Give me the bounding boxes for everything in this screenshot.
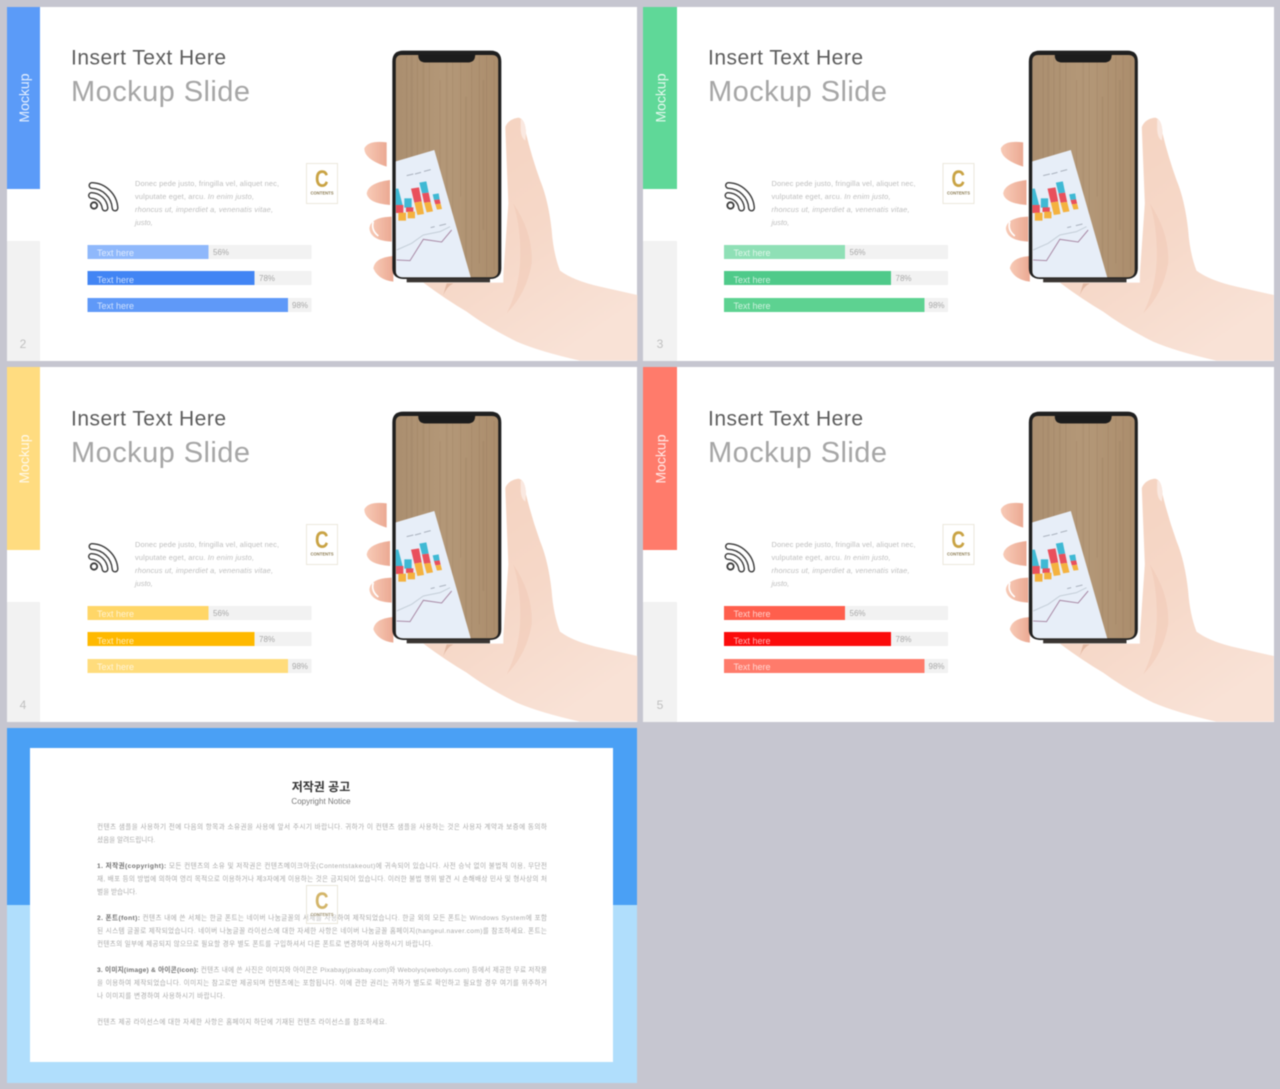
side tab: red [643, 367, 677, 550]
icon: signal [727, 186, 752, 209]
progress bars: 78% [259, 274, 275, 283]
body text [134, 179, 279, 227]
body text: justo, [134, 218, 153, 227]
slide 5: red mockup [643, 367, 1274, 722]
logo [943, 524, 974, 564]
watermark logo: C [315, 888, 328, 915]
clause 2: 2. 폰트(font): 컨텐츠 내에 쓴 서체는 한글 폰트는 네이버 나눔글꼴의 서체를 사용하여 제작되었습니다. 한글 외의 모든 폰트는 Windows System에 포함 [97, 913, 547, 922]
page number panel [643, 241, 677, 361]
heading: Insert Text Here [708, 408, 863, 430]
phone in hand [1001, 412, 1274, 722]
heading: Mockup Slide [71, 437, 250, 469]
progress bars: 56% [213, 609, 229, 618]
progress bars: Text here [734, 662, 771, 672]
logo: C [315, 527, 328, 554]
phone in hand [364, 51, 637, 361]
logo: CONTENTS [947, 552, 970, 556]
body text: vulputate eget, arcu. In enim justo, [772, 553, 890, 562]
progress bars [724, 606, 948, 673]
progress bars: 56% [850, 609, 866, 618]
heading: Insert Text Here [71, 46, 226, 70]
watermark logo [306, 886, 338, 924]
logo [306, 524, 338, 564]
logo: C [952, 166, 965, 193]
body text: vulputate eget, arcu. In enim justo, [772, 192, 890, 201]
clause 1: 1. 저작권(copyright): 모든 컨텐츠의 소유 및 저작권은 컨텐츠메이크아웃(Contentstakeout)에 귀속되어 있습니다. 사전 승낙 없이 불법적 이용, 무단전 [97, 861, 547, 870]
watermark logo: CONTENTS [310, 912, 334, 917]
body text: justo, [770, 579, 789, 588]
heading: Insert Text Here [708, 46, 863, 70]
side tab: green [643, 7, 677, 189]
body text: vulputate eget, arcu. In enim justo, [135, 553, 254, 562]
logo: CONTENTS [310, 552, 334, 556]
page number panel [7, 241, 40, 361]
slide: copyright notice [7, 728, 637, 1083]
body text: Donec pede justo, fringilla vel, aliquet nec, [135, 540, 279, 549]
body text: rhoncus ut, imperdiet a, venenatis vitae, [772, 205, 910, 214]
body text: justo, [770, 218, 789, 227]
body text: Donec pede justo, fringilla vel, aliquet nec, [772, 179, 916, 188]
progress bars: Text here [97, 636, 134, 646]
clause 3: 을 이용하여 제작되었습니다. 이미지는 참고로만 제공되며 컨텐츠에는 포함됩니다. 이에 관한 권리는 귀하가 별도로 확인하고 필요할 경우 여기를 위주하거 [97, 978, 547, 987]
notice title: 저작권 공고 [292, 779, 350, 794]
page number panel: 5 [657, 698, 664, 712]
body text: Donec pede justo, fringilla vel, aliquet nec, [772, 540, 916, 549]
intro paragraph: 셨음을 알려드립니다. [97, 835, 155, 844]
heading: Mockup Slide [71, 76, 250, 108]
progress bars: 98% [292, 662, 308, 671]
progress bars: Text here [734, 275, 771, 285]
white notice panel [30, 748, 613, 1062]
body text [134, 540, 279, 588]
progress bars: 78% [896, 274, 912, 283]
body text: rhoncus ut, imperdiet a, venenatis vitae, [135, 566, 273, 575]
slide 2: blue mockup [7, 7, 637, 361]
logo [943, 164, 974, 204]
intro paragraph [97, 822, 547, 844]
body text: vulputate eget, arcu. In enim justo, [135, 192, 254, 201]
tab label: Mockup [16, 434, 32, 484]
heading [71, 408, 250, 469]
page number panel: 2 [20, 337, 27, 351]
progress bars: Text here [97, 609, 134, 619]
clause 1 [97, 861, 547, 896]
tab label: Mockup [652, 434, 668, 484]
page number panel [7, 602, 40, 722]
slide 3: green mockup [643, 7, 1274, 361]
icon: signal [727, 546, 752, 570]
clause 1: 재, 배포 등의 방법에 의하여 영리 목적으로 이용하거나 제3자에게 이용하는 것은 금지되어 있습니다. 이러한 불법 행위 발견 시 손해배상 민사 및 형사상의 처 [97, 874, 547, 883]
body text: rhoncus ut, imperdiet a, venenatis vitae, [772, 566, 910, 575]
slide 4: yellow mockup [7, 367, 637, 722]
heading: Mockup Slide [708, 437, 887, 469]
heading [708, 46, 887, 108]
heading [71, 46, 250, 108]
progress bars: Text here [97, 248, 134, 258]
clause 2: 컨텐츠의 일부에 제공되지 않으므로 필요할 경우 별도 폰트를 구입하셔서 다른 폰트로 변경하여 사용하시기 바랍니다. [97, 939, 433, 948]
progress bars: Text here [97, 301, 134, 311]
closing line: 컨텐츠 제공 라이선스에 대한 자세한 사항은 홈페이지 하단에 기재된 컨텐츠 라이선스를 참조하세요. [97, 1017, 387, 1026]
notice title [291, 779, 351, 806]
page number panel [643, 602, 677, 722]
clause 1: 벌을 받습니다. [97, 887, 137, 896]
side tab: yellow [7, 367, 40, 550]
clause 3 [97, 965, 547, 1000]
progress bars: 98% [292, 301, 308, 310]
icon: signal [91, 546, 115, 570]
logo: CONTENTS [310, 190, 334, 196]
progress bars: Text here [734, 636, 771, 646]
progress bars: Text here [734, 301, 771, 311]
page number panel: 4 [20, 698, 27, 712]
progress bars: 98% [928, 301, 945, 310]
logo: CONTENTS [947, 190, 970, 196]
logo: C [952, 527, 965, 554]
clause 3: 3. 이미지(image) & 아이콘(icon): 컨텐츠 내에 쓴 사진은 이미지와 아이콘은 Pixabay(pixabay.com)와 Webolys(webolys.com) 등에서 제공한 무료 저작물 [97, 965, 547, 974]
tab label: Mockup [16, 73, 32, 123]
progress bars: Text here [734, 609, 771, 619]
heading: Mockup Slide [708, 76, 887, 108]
icon: signal [91, 186, 115, 209]
body text: justo, [134, 579, 153, 588]
body text [770, 540, 916, 588]
progress bars [724, 245, 948, 312]
progress bars: 78% [896, 635, 912, 644]
logo [306, 164, 338, 204]
progress bars [88, 606, 312, 673]
phone in hand [364, 412, 637, 722]
side tab: blue [7, 7, 40, 189]
clause 2 [97, 913, 547, 948]
progress bars: 78% [259, 635, 275, 644]
clause 2: 된 시스템 글꼴로 제작되었습니다. 네이버 나눔글꼴 라이선스에 대한 자세한 사항은 네이버 나눔글꼴 홈페이지(hangeul.naver.com)를 참조하세요. 폰트는 [97, 926, 547, 935]
progress bars [88, 245, 312, 312]
progress bars: 98% [928, 662, 945, 671]
logo: C [315, 166, 328, 193]
heading [708, 408, 887, 469]
intro paragraph: 컨텐츠 샘플을 사용하기 전에 다음의 항목과 소유권을 사용에 앞서 주시기 바랍니다. 귀하가 이 컨텐츠 샘플을 사용하는 것은 사용자 계약과 보증에 동의하 [97, 822, 547, 831]
heading: Insert Text Here [71, 408, 226, 430]
page number panel: 3 [657, 337, 664, 351]
clause 3: 나 이미지를 변경하여 사용하시기 바랍니다. [97, 991, 225, 1000]
notice title: Copyright Notice [291, 797, 351, 806]
progress bars: Text here [97, 662, 134, 672]
body text: Donec pede justo, fringilla vel, aliquet nec, [135, 179, 279, 188]
progress bars: 56% [213, 248, 229, 257]
body text: rhoncus ut, imperdiet a, venenatis vitae, [135, 205, 273, 214]
body text [770, 179, 916, 227]
progress bars: 56% [850, 248, 866, 257]
progress bars: Text here [734, 248, 771, 258]
progress bars: Text here [97, 275, 134, 285]
phone in hand [1001, 51, 1274, 361]
tab label: Mockup [652, 73, 668, 123]
